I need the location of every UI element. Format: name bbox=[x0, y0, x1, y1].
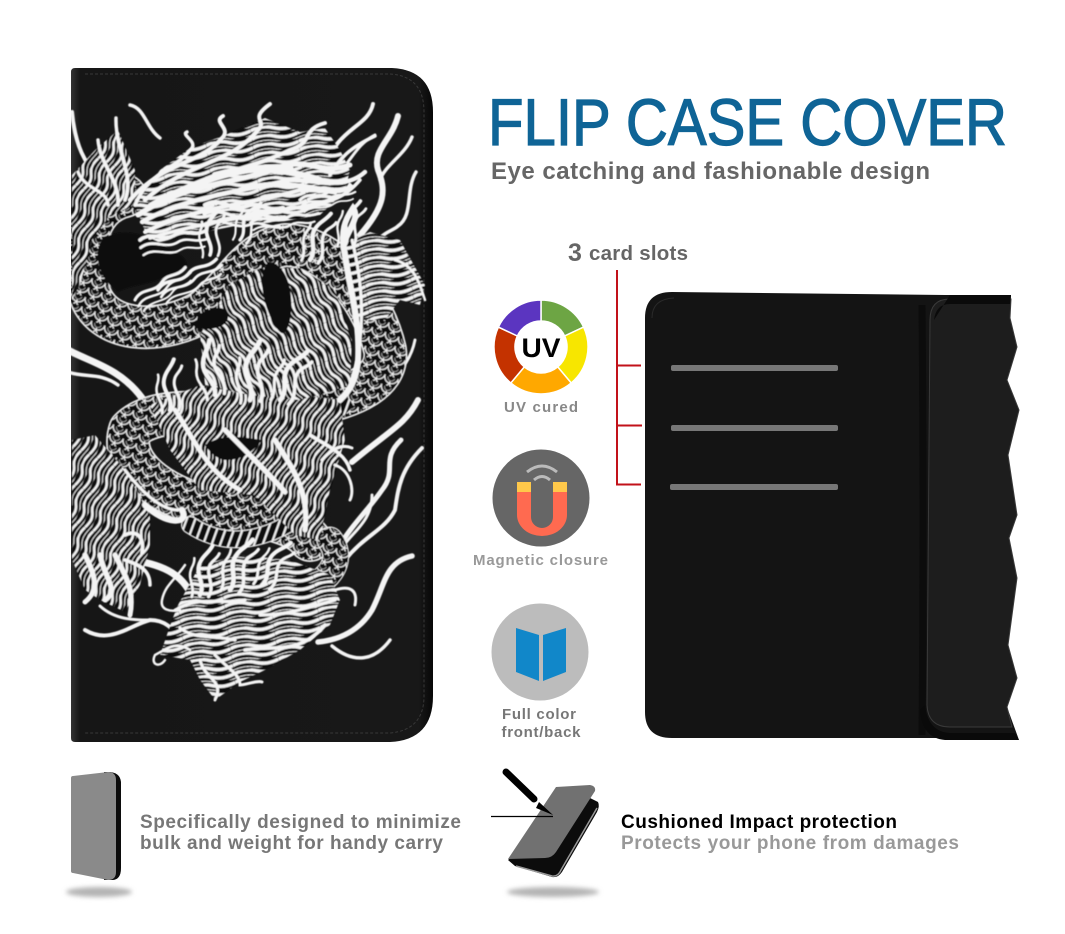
central flames bbox=[193, 337, 228, 402]
open case interior bbox=[645, 292, 1019, 740]
text: cushioned impact bbox=[621, 812, 959, 854]
middle flames bbox=[175, 410, 352, 530]
card slot 3 bbox=[670, 484, 838, 490]
dragon illustration bbox=[68, 104, 425, 700]
card slots label: 3 bbox=[568, 239, 582, 267]
left tail flames mass bbox=[72, 130, 135, 300]
text: slim design bbox=[140, 812, 461, 854]
subtitle: Eye catching and fashionable design bbox=[491, 158, 930, 185]
leather seam bbox=[922, 305, 923, 735]
background tendrils bbox=[68, 104, 422, 658]
phone case front with dragon artwork bbox=[68, 68, 433, 742]
tail and body bands bbox=[85, 196, 385, 595]
left claw mass bbox=[72, 435, 150, 612]
icon: magnetic closure bbox=[492, 450, 590, 546]
text: slim design: Specifically designed to minimize bbox=[140, 812, 461, 833]
head and beard mass bbox=[160, 555, 340, 700]
icon: slim case bbox=[66, 772, 132, 897]
lower central flames mass bbox=[150, 385, 345, 540]
card slot 1 bbox=[671, 365, 838, 371]
label: Full color front/back: Full color bbox=[502, 706, 576, 723]
upper central flames mass bbox=[200, 268, 352, 400]
label: UV cured: UV cured bbox=[504, 399, 578, 416]
dragon crest pillar bbox=[340, 208, 425, 400]
card slot 2 bbox=[671, 425, 838, 431]
title: FLIP CASE COVER bbox=[488, 85, 1007, 159]
label: Full color front/back: front/back bbox=[502, 724, 581, 741]
icon: UV cured bbox=[494, 300, 588, 394]
label: Magnetic closure: Magnetic closure bbox=[473, 552, 608, 569]
mane mass bbox=[135, 118, 350, 245]
text: cushioned impact: Cushioned Impact protection bbox=[621, 812, 897, 833]
left claw strokes bbox=[85, 470, 184, 615]
icon: full color book bbox=[492, 604, 588, 700]
top mane flames bbox=[78, 104, 375, 238]
phone in case bbox=[927, 299, 1019, 727]
icon: UV cured: UV bbox=[522, 333, 560, 363]
label: Full color front/back bbox=[502, 706, 581, 741]
right crest mass bbox=[340, 232, 425, 320]
dragon head strokes bbox=[154, 565, 356, 700]
icon: cushioned impact phone and pen bbox=[491, 772, 599, 897]
card slots label: card slots bbox=[589, 242, 688, 265]
red bracket for card slots bbox=[617, 270, 642, 484]
black openings bbox=[98, 232, 291, 460]
text: cushioned impact: Protects your phone from damages bbox=[621, 833, 959, 854]
card slots label bbox=[568, 239, 688, 267]
text: slim design: bulk and weight for handy carry bbox=[140, 833, 443, 854]
